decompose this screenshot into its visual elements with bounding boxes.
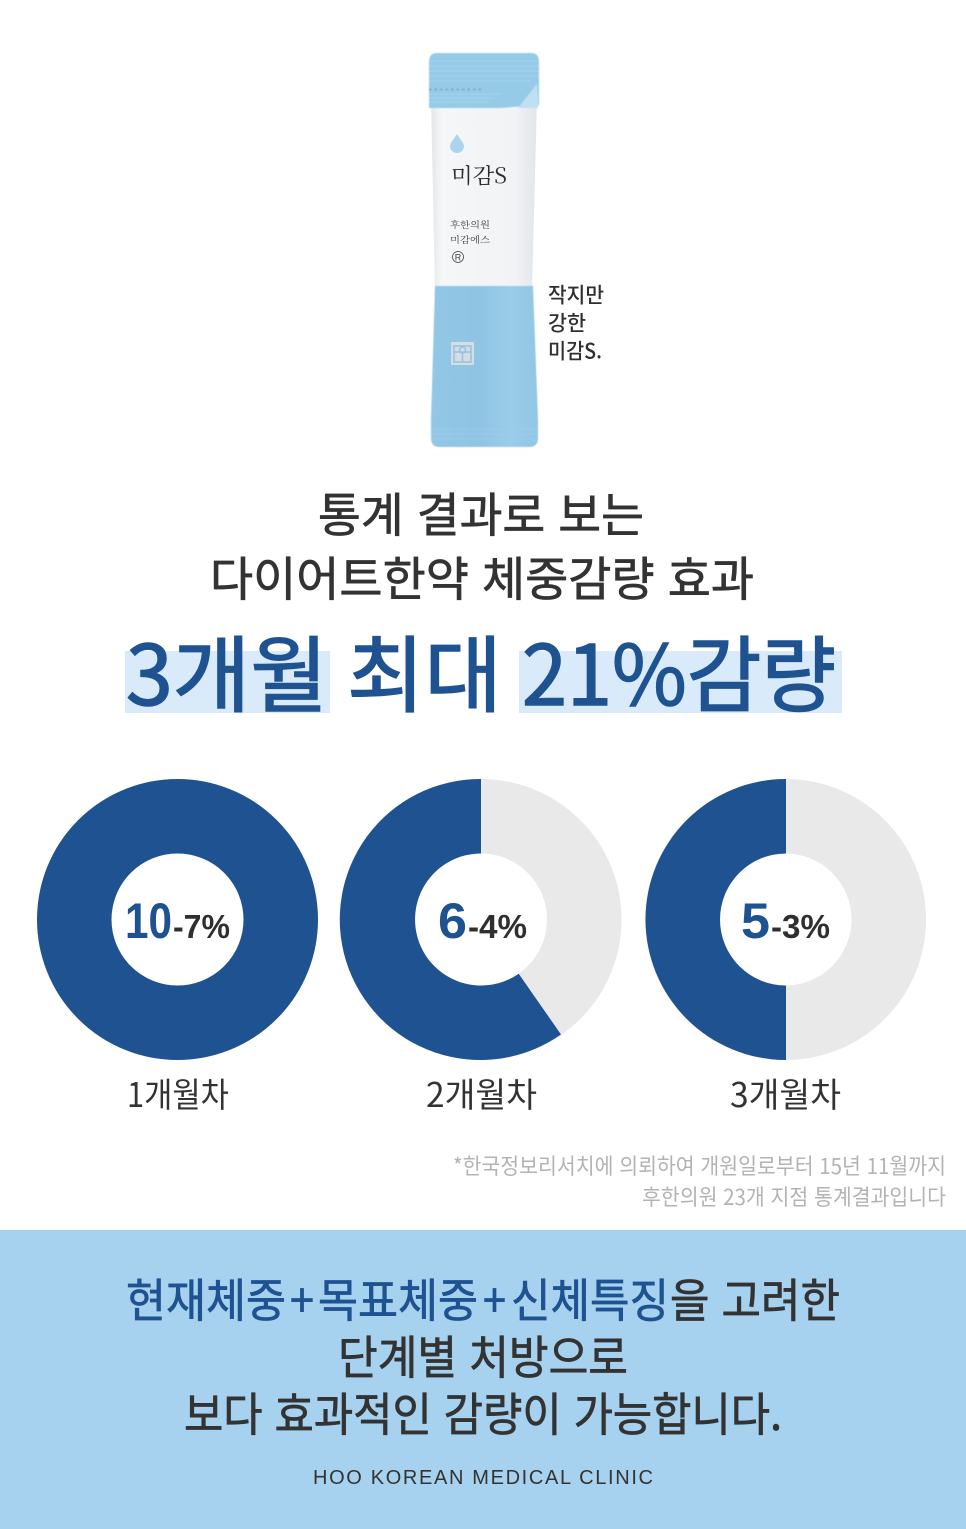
message line 1: 신체특징 <box>511 1265 669 1331</box>
donut labels: 2개월차 <box>426 1068 537 1117</box>
pouch product name: 미감S <box>451 160 507 190</box>
message line 1: + <box>290 1265 314 1331</box>
pouch lower blue panel <box>431 286 538 447</box>
chart: month 3 donut: -3% <box>771 908 830 945</box>
message line 1: 목표체중 <box>318 1265 478 1331</box>
value: 10 -7%: 10 <box>125 893 172 949</box>
product caption <box>548 280 604 366</box>
message line 3: 보다 효과적인 감량이 가능합니다. <box>184 1379 782 1445</box>
pouch white body <box>431 100 537 290</box>
icon: clinic logo stamp <box>451 342 474 365</box>
chart: month 2 donut <box>340 779 584 1060</box>
value: 5 -3%: 5 <box>741 893 770 949</box>
heading: statistics subtitle: 다이어트한약 체중감량 효과 <box>210 541 754 610</box>
headline: 3 months up to 21% loss: 최대 <box>347 609 502 729</box>
clinic name: HOO KOREAN MEDICAL CLINIC <box>313 1467 653 1489</box>
footnote: 후한의원 23개 지점 통계결과입니다 <box>642 1180 946 1212</box>
pouch small label <box>450 218 490 246</box>
chart: month 3 donut <box>646 779 889 1060</box>
product caption: 강한 <box>548 308 586 338</box>
message line 2: 단계별 처방으로 <box>338 1322 628 1388</box>
donut labels: 1개월차 <box>127 1068 229 1117</box>
product: Migam S stick pouch <box>429 53 539 447</box>
message line 1 <box>126 1265 840 1331</box>
headline: 3 months up to 21% loss: 3개월 <box>126 609 328 729</box>
value: 6 -4%: 6 <box>438 893 467 949</box>
message line 1: + <box>483 1265 506 1331</box>
pouch small label: 후한의원 <box>450 218 490 231</box>
product caption: 미감S. <box>548 336 602 366</box>
headline highlight bars <box>125 651 842 713</box>
pouch top blue tab <box>429 53 539 108</box>
panel: bottom message band <box>0 1230 966 1529</box>
message line 1: 현재체중 <box>126 1265 286 1331</box>
message line 1: 을 고려한 <box>670 1265 840 1331</box>
chart: month 1 donut <box>74 816 281 1023</box>
chart: month 1 donut: -7% <box>173 908 230 945</box>
product caption: 작지만 <box>548 280 604 310</box>
headline: 3 months up to 21% loss <box>126 609 836 729</box>
registered mark: R <box>455 252 462 262</box>
icon: water drop <box>450 134 464 153</box>
donut labels: 3개월차 <box>730 1068 841 1117</box>
registered mark <box>452 252 464 262</box>
headline: 3 months up to 21% loss: 21%감량 <box>522 609 836 729</box>
donut labels <box>127 1068 841 1117</box>
heading: statistics subtitle <box>210 477 754 610</box>
pouch small label: 미감에스 <box>450 233 490 246</box>
footnote <box>453 1149 946 1212</box>
heading: statistics subtitle: 통계 결과로 보는 <box>318 477 644 546</box>
chart: month 2 donut: -4% <box>468 908 527 945</box>
